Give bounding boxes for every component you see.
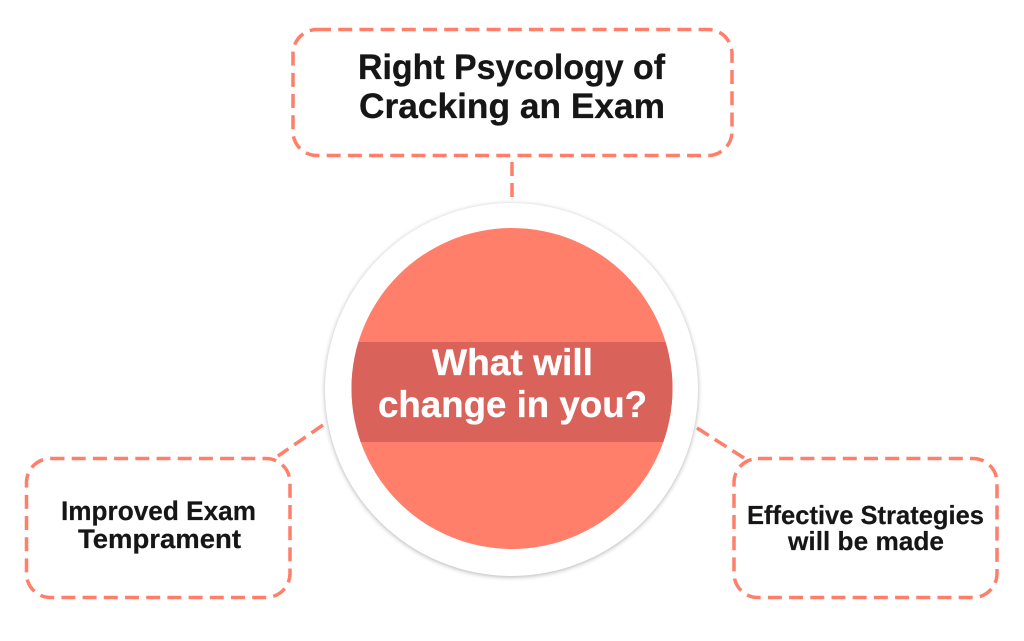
central text: What will bbox=[432, 342, 593, 383]
panel: central circle bbox=[325, 203, 698, 577]
text: improved exam temprament bbox=[61, 496, 256, 554]
heading: right psycology: Cracking an Exam bbox=[359, 87, 665, 126]
central text bbox=[378, 342, 647, 425]
heading: right psycology bbox=[358, 48, 665, 126]
panel: top box bbox=[293, 30, 732, 156]
panel: right box bbox=[734, 458, 997, 598]
connector: left box to circle bbox=[278, 425, 323, 456]
band bbox=[340, 342, 684, 442]
heading: right psycology: Right Psycology of bbox=[358, 48, 665, 87]
connector: top box to circle bbox=[510, 162, 514, 197]
text: improved exam temprament: Improved Exam bbox=[61, 496, 256, 526]
central text: change in you? bbox=[378, 384, 647, 425]
text: effective strategies: will be made bbox=[787, 526, 944, 556]
connector: right box to circle bbox=[697, 428, 744, 458]
text: effective strategies: Effective Strategies bbox=[747, 500, 984, 530]
panel: left box bbox=[26, 458, 290, 598]
text: improved exam temprament: Temprament bbox=[78, 524, 241, 554]
text: effective strategies bbox=[747, 500, 984, 556]
